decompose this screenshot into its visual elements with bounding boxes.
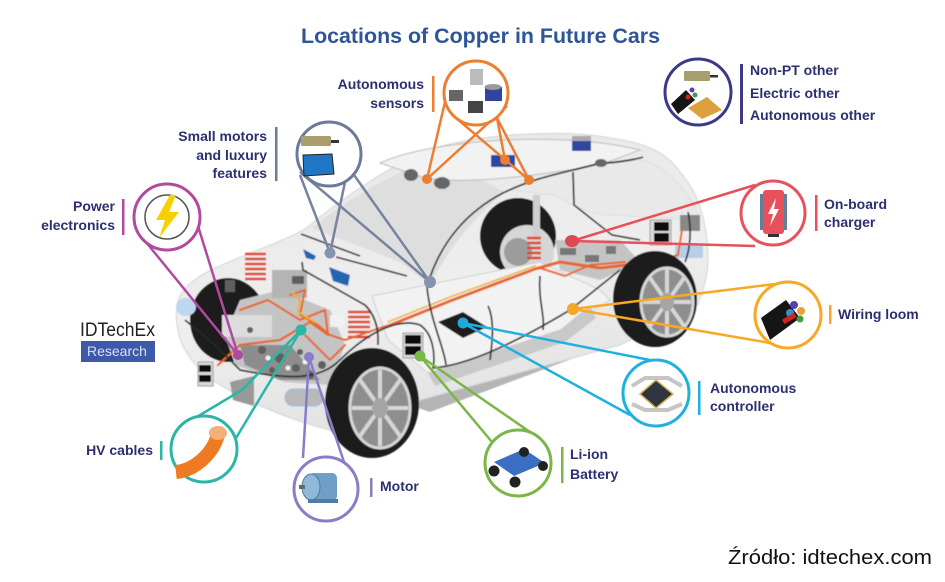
black wiring [185,157,690,377]
callout: autonomous sensors: sensors [370,95,424,111]
callout: other categories: Electric other [750,85,840,101]
callout: autonomous controller: controller [710,398,775,414]
car body [176,133,708,440]
callout: wiring loom: Wiring loom [838,306,919,322]
callout: autonomous controller [458,318,797,426]
side windows [510,160,700,220]
callout: motor: Motor [380,478,419,494]
far front wheel [190,278,266,362]
battery pack [372,262,610,373]
logo: IDTechEx Research: Research [87,343,147,359]
rear wheel [613,251,697,347]
callout: small motors [178,122,436,288]
small motors label: Small motors [178,128,267,144]
callout: on-board charger [565,181,887,247]
logo: IDTechEx Research [80,319,155,362]
icon: charger [760,190,787,237]
radar modules [198,220,671,386]
front wheel [325,348,419,458]
callout: autonomous sensors [338,61,534,185]
callout: other categories [665,59,876,125]
icon: wire bundle [761,300,805,340]
callout: wiring loom [567,282,919,348]
copper harness [218,230,682,365]
roof sensors [404,136,607,189]
power electronics label: Power [73,198,116,214]
callout: other categories: Autonomous other [750,107,876,123]
other categories list: Non-PT other [750,62,839,78]
controller label [698,381,700,415]
icon: lightning [145,195,189,239]
icon: motor, wires and circuit board [671,71,722,119]
callout: power electronics: electronics [41,217,115,233]
callout: HV cables [86,324,306,482]
callout: Li-ion battery [414,350,618,496]
far rear wheel [480,195,556,279]
car shadow [400,335,610,412]
rear subframe [555,240,640,280]
source note: Źródło: idtechex.com [728,546,932,569]
callout: on-board charger: charger [824,214,876,230]
icon: HV cable [176,426,227,472]
HV cables label: HV cables [86,442,153,458]
windshield [312,158,505,285]
logo: IDTechEx Research: IDTechEx [80,319,155,341]
Li-ion label [561,447,564,483]
inverter box [230,376,254,406]
roof [380,139,640,180]
sensors label: Autonomous [338,76,424,92]
motor label [370,478,372,497]
icon: battery chassis [488,447,548,488]
coil springs [245,238,541,337]
wipers [301,234,407,276]
on-board charger label [815,195,818,231]
small blue displays [303,249,316,260]
title: Locations of Copper in Future Cars [301,24,660,48]
callout: power electronics [41,184,243,360]
icon: motor and tablet [301,136,339,176]
callout: motor [294,352,419,521]
engine detail [225,276,326,379]
engine bay [225,290,345,385]
wiring loom label [829,305,832,324]
callout: Li-ion battery: Battery [570,466,618,482]
car illustration [176,133,708,458]
motor marker [285,389,323,406]
callout: on-board charger: On-board [824,196,887,212]
callout: autonomous controller: Autonomous [710,380,797,396]
icon: electric motor [299,473,338,503]
icon: sensors [449,69,502,113]
light blue lamp [176,298,196,316]
controller box on car [438,312,487,338]
callout: small motors: features [213,165,267,181]
callout: small motors: and luxury [196,147,267,163]
icon: chip [632,378,682,410]
callout: Li-ion battery: Li-ion [570,446,608,462]
